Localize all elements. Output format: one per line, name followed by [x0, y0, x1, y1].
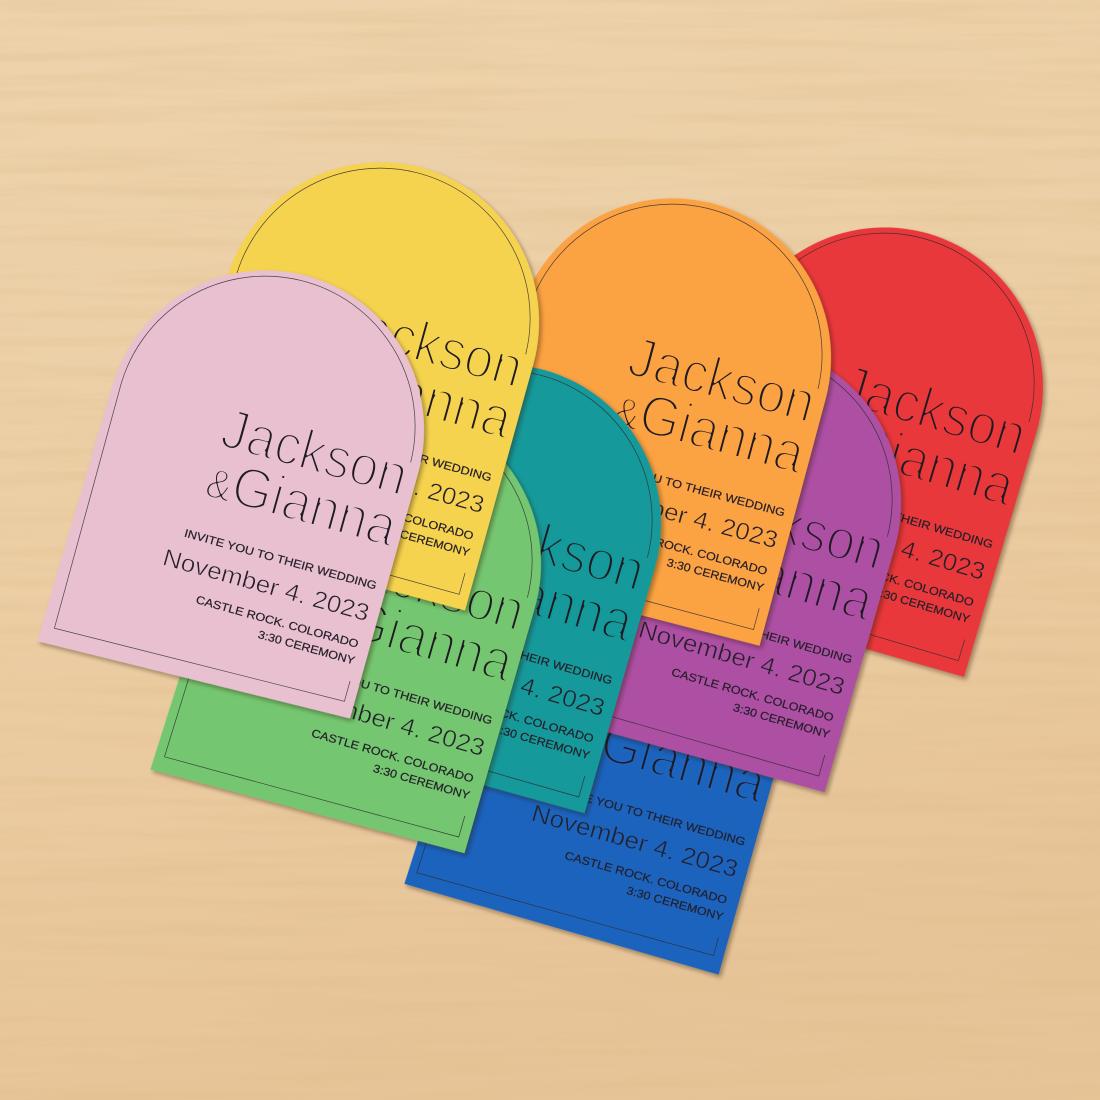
card: green: INVITE YOU TO THEIR WEDDING [299, 661, 493, 727]
card: orange [445, 161, 867, 649]
card: yellow: November 4. 2023 [275, 436, 487, 519]
card: blue: 3:30 CEREMONY [625, 885, 725, 924]
card: red [652, 187, 1082, 680]
invite line: INVITE YOU TO THEIR WEDDING [183, 528, 378, 592]
location: CASTLE ROCK. COLORADO [194, 594, 360, 651]
card: blue [404, 487, 830, 975]
card: pink [37, 233, 461, 727]
card: purple [511, 304, 939, 795]
card: green: CASTLE ROCK. COLORADO [310, 728, 475, 786]
card: purple: &Gianna [676, 519, 881, 634]
card: orange: INVITE YOU TO THEIR WEDDING [591, 456, 786, 519]
card: yellow [151, 124, 576, 613]
card: blue: Jackson [584, 652, 784, 765]
card: orange: November 4. 2023 [568, 473, 781, 554]
card: teal: INVITE YOU TO THEIR WEDDING [419, 621, 613, 687]
pink card inner border [53, 241, 450, 708]
card: purple: Jackson [692, 469, 892, 583]
ampersand and second name: &Gianna [200, 446, 404, 560]
card: green: November 4. 2023 [276, 677, 488, 762]
card: green: Jackson [332, 530, 532, 644]
card: purple: November 4. 2023 [636, 616, 848, 701]
card: red: November 4. 2023 [776, 500, 988, 586]
card: purple: CASTLE ROCK. COLORADO [670, 667, 835, 725]
time: 3:30 CEREMONY [256, 629, 356, 667]
card: red: &Gianna [818, 402, 1022, 519]
card: orange: &Gianna [608, 374, 812, 487]
card: teal: Jackson [452, 490, 652, 604]
card: blue: November 4. 2023 [528, 800, 741, 883]
card: teal: 3:30 CEREMONY [492, 723, 592, 762]
card: orange: Jackson [622, 324, 822, 435]
date: November 4. 2023 [160, 544, 372, 627]
card: green: &Gianna [316, 580, 521, 695]
card: yellow: 3:30 CEREMONY [371, 521, 471, 559]
card: yellow: CASTLE ROCK. COLORADO [309, 486, 475, 543]
card: purple: INVITE YOU TO THEIR WEDDING [659, 600, 853, 666]
card: yellow: INVITE YOU TO THEIR WEDDING [298, 420, 493, 484]
card: red: Jackson [833, 353, 1034, 468]
card: teal: November 4. 2023 [396, 637, 608, 722]
card: red: 3:30 CEREMONY [872, 586, 972, 626]
card: orange: CASTLE ROCK. COLORADO [603, 523, 769, 578]
card: green: 3:30 CEREMONY [372, 763, 472, 802]
card: yellow: Jackson [330, 288, 530, 401]
card: green [150, 365, 579, 859]
card: teal: &Gianna [436, 540, 641, 655]
card: blue: &Gianna [569, 702, 773, 816]
pink card shape [37, 233, 461, 727]
card: red: CASTLE ROCK. COLORADO [810, 550, 975, 609]
card: blue: INVITE YOU TO THEIR WEDDING [552, 784, 747, 849]
card: yellow: &Gianna [315, 338, 519, 452]
card: purple: 3:30 CEREMONY [732, 702, 832, 741]
card: blue: CASTLE ROCK. COLORADO [563, 850, 728, 907]
card: teal [271, 325, 699, 816]
names: Jackson [215, 396, 415, 509]
card: red: INVITE YOU TO THEIR WEDDING [800, 483, 994, 551]
card: orange: 3:30 CEREMONY [665, 557, 765, 595]
card: teal: CASTLE ROCK. COLORADO [430, 688, 595, 746]
